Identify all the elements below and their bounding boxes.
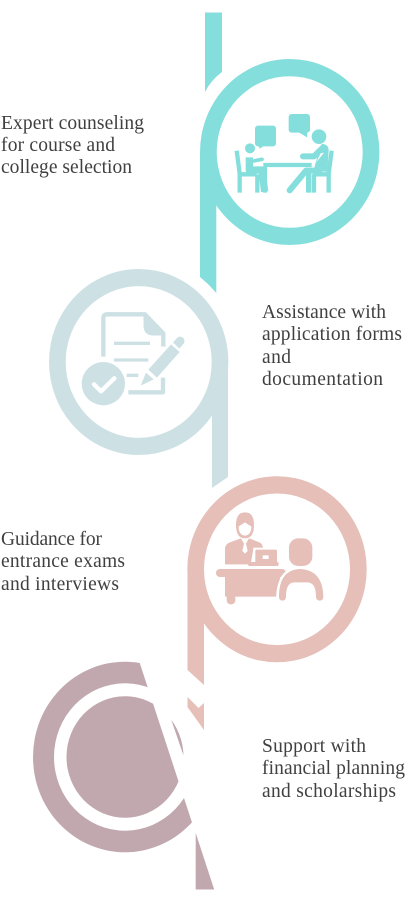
panel: step 2 blue ring [49,269,228,488]
ring [49,269,228,455]
text: step 2 description: documentation [262,369,383,390]
text: step 3 description: and interviews [1,574,119,595]
panel: step 4 purple ring [33,662,217,890]
text: step 1 description [1,113,144,178]
text: step 4 description: Support with [262,736,366,757]
icon: document with pencil and check mark [82,314,185,405]
icon: adviser at desk with visitor [216,512,326,604]
text: step 4 description [262,736,405,802]
text: step 2 description [262,302,402,390]
text: step 3 description [1,529,125,595]
ring [187,476,367,662]
disc crescent [171,720,184,756]
icon: two people talking at a table [237,114,332,193]
chevron stem fragment [188,697,204,730]
ring and inner disc cut by a diagonal [33,662,192,852]
ring [200,59,379,245]
text: step 1 description: college selection [1,157,132,178]
text: step 2 description: Assistance with [262,302,386,323]
lower stem [212,362,228,488]
text: step 1 description: Expert counseling [1,113,144,134]
text: step 3 description: Guidance for [1,529,102,550]
text: step 4 description: financial planning [262,758,405,779]
stem [188,569,204,685]
text: step 2 description: and [262,347,291,368]
panel: step 3 pink ring [187,476,367,730]
lower stem [200,152,216,293]
text: step 3 description: entrance exams [1,551,125,572]
text: step 1 description: for course and [1,135,115,156]
panel: step 1 teal ring [200,12,379,293]
top stem segment [205,12,222,92]
bottom stem triangle [196,833,214,890]
text: step 4 description: and scholarships [262,781,396,802]
text: step 2 description: application forms [262,324,402,345]
